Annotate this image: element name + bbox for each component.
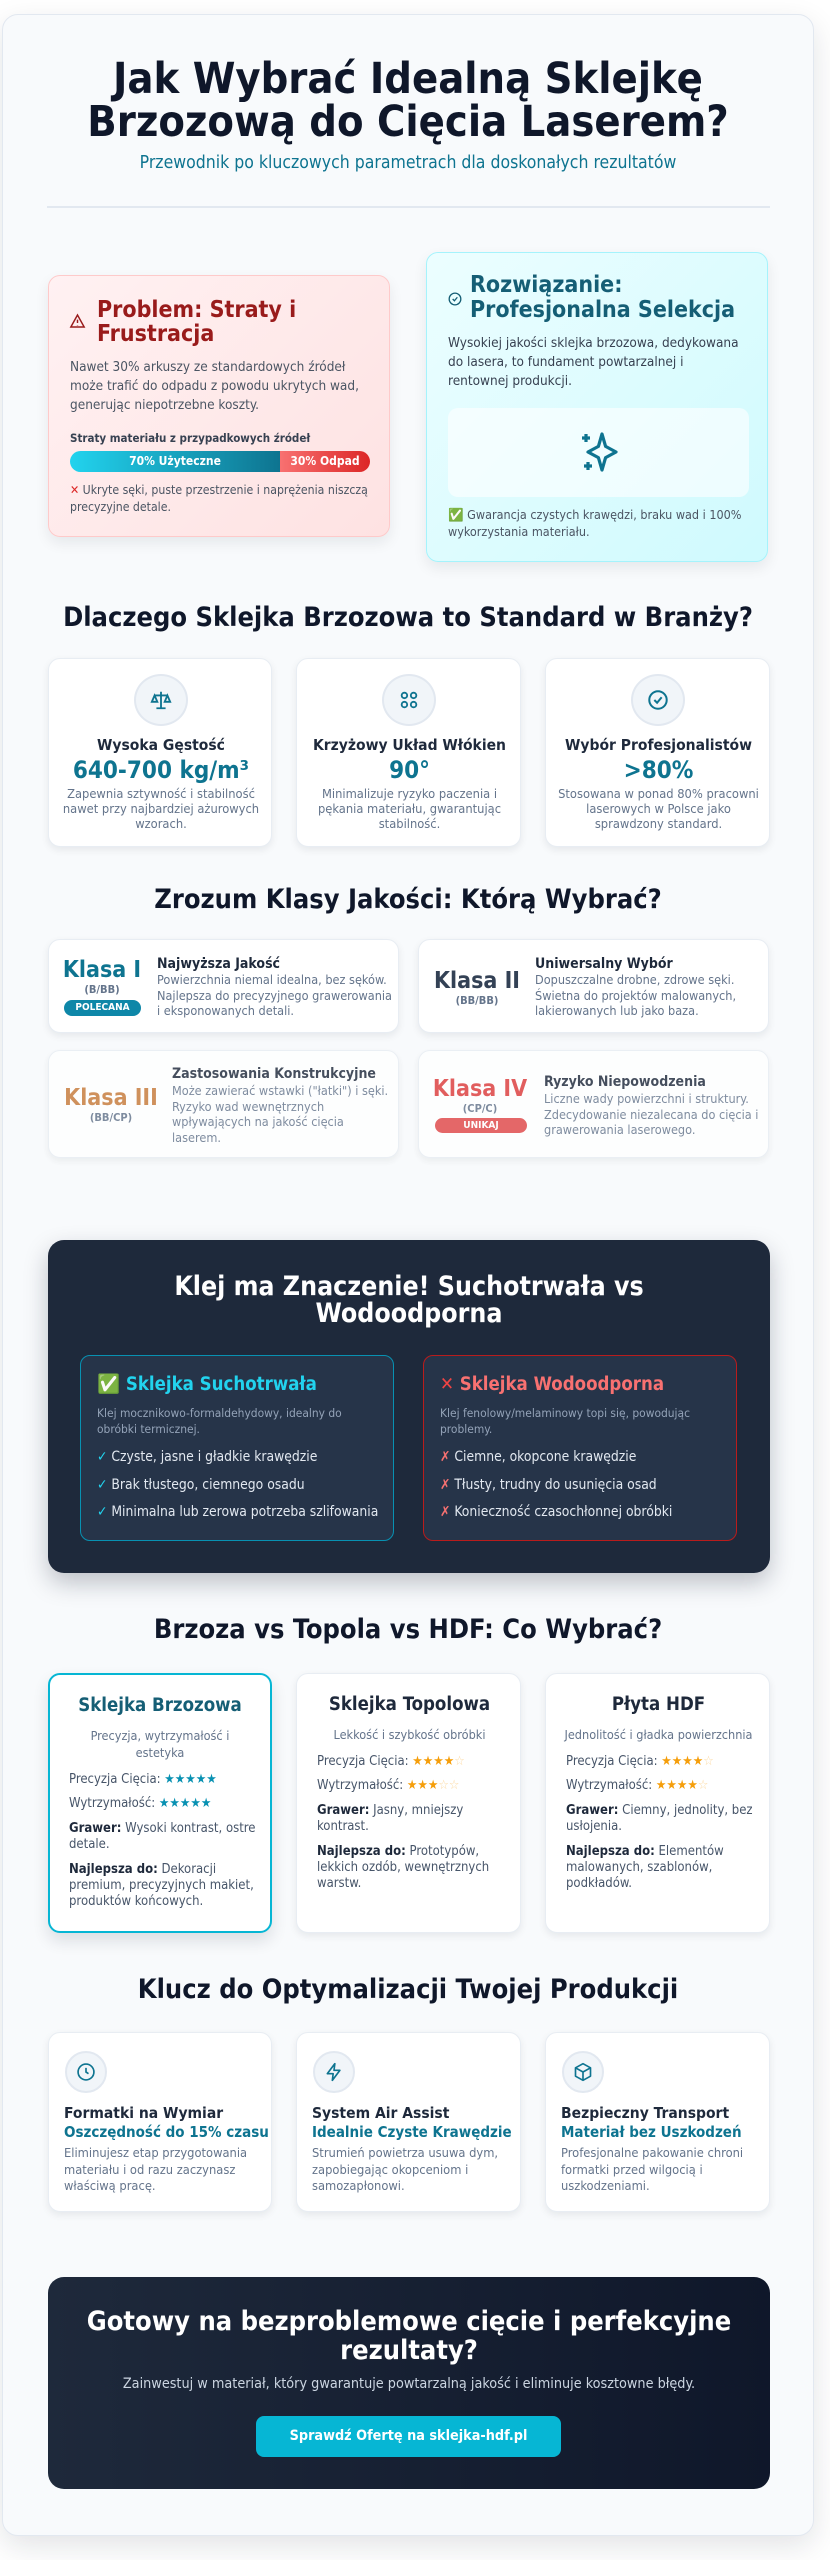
box: dry glue: ✅ Sklejka Suchotrwała: [97, 1374, 317, 1395]
solution text: Wysokiej jakości sklejka brzozowa, dedykowana do lasera, to fundament powtarzalnej i rentownej produkcji.: [448, 335, 739, 389]
heading: why birch: Dlaczego Sklejka Brzozowa to Standard w Branży?: [63, 602, 753, 633]
feature card: air assist: [296, 2032, 521, 2212]
class card: II: Uniwersalny Wybór: [535, 956, 673, 972]
bar label: Straty materiału z przypadkowych źródeł: [70, 431, 310, 445]
stat card: professionals: [545, 658, 770, 847]
feature card: transport: Bezpieczny Transport: [561, 2104, 729, 2122]
panel: glue comparison: [48, 1240, 770, 1573]
panel: problem: [48, 275, 390, 537]
class card: IV: [418, 1050, 769, 1158]
icon: warning: [70, 314, 86, 328]
CTA heading: rezultaty?: [340, 2335, 478, 2366]
icon: grid: [382, 674, 436, 726]
box: dry glue: [80, 1355, 394, 1541]
compare card: birch: Sklejka Brzozowa: [78, 1695, 242, 1716]
compare card: birch: Grawer: Wysoki kontrast, ostre detale.: [69, 1821, 256, 1852]
CTA text: Zainwestuj w materiał, który gwarantuje powtarzalną jakość i eliminuje kosztowne błędy.: [123, 2376, 695, 2392]
CTA button: Sprawdź Ofertę na sklejka-hdf.pl: [290, 2428, 527, 2444]
heading: classes: Zrozum Klasy Jakości: Którą Wybrać?: [154, 884, 662, 915]
compare card: poplar: Najlepsza do: Prototypów, lekkich ozdób, wewnętrznych warstw.: [317, 1844, 489, 1891]
stat card: density: 640-700 kg/m³: [73, 756, 249, 784]
class card: I: Najwyższa Jakość: [157, 956, 280, 972]
class card: I: [48, 939, 399, 1033]
glue heading: Wodoodporna: [316, 1298, 502, 1329]
feature card: formats: Oszczędność do 15% czasu: [64, 2123, 269, 2141]
class card: II: Dopuszczalne drobne, zdrowe sęki. Świetna do projektów malowanych, lakierowanych lub jako baza.: [535, 972, 736, 1018]
panel: solution: [426, 252, 768, 562]
compare card: HDF: Płyta HDF: [612, 1694, 705, 1715]
compare card: HDF: Precyzja Cięcia: ★★★★☆: [566, 1754, 714, 1769]
stat card: cross grain: [296, 658, 521, 847]
box: dry glue: ✓ Minimalna lub zerowa potrzeba szlifowania: [97, 1504, 378, 1520]
box: dry glue: Klej mocznikowo-formaldehydowy, idealny do obróbki termicznej.: [97, 1406, 342, 1436]
compare card: birch: Najlepsza do: Dekoracji premium, precyzyjnych makiet, produktów końcowych.: [69, 1862, 254, 1909]
class card: III: Zastosowania Konstrukcyjne: [172, 1066, 376, 1082]
box: dry glue: ✓ Brak tłustego, ciemnego osadu: [97, 1477, 305, 1493]
compare card: poplar: Lekkość i szybkość obróbki: [334, 1727, 486, 1742]
feature card: air assist: Strumień powietrza usuwa dym, zapobiegając okopceniom i samozapłonowi.: [312, 2146, 498, 2194]
class card: I: Klasa I: [63, 957, 141, 983]
solution heading: Rozwiązanie: Profesjonalna Selekcja: [470, 272, 735, 323]
title: Jak Wybrać Idealną Sklejkę: [113, 54, 703, 104]
stat card: cross grain: 90°: [389, 756, 430, 784]
feature card: air assist: Idealnie Czyste Krawędzie: [312, 2123, 512, 2141]
stat card: professionals: Stosowana w ponad 80% pracowni laserowych w Polsce jako sprawdzony standard.: [558, 787, 759, 832]
class card: IV: Liczne wady powierzchni i struktury. Zdecydowanie niezalecana do cięcia i grawerowania laserowego.: [544, 1091, 758, 1137]
compare card: HDF: Jednolitość i gładka powierzchnia: [564, 1727, 752, 1742]
CTA heading: Gotowy na bezproblemowe cięcie i perfekcyjne: [87, 2306, 731, 2337]
class card: I: (B/BB): [84, 983, 120, 996]
class card: II: [418, 939, 769, 1033]
compare card: HDF: Wytrzymałość: ★★★★☆: [566, 1778, 708, 1793]
stat card: cross grain: Minimalizuje ryzyko paczenia i pękania materiału, gwarantując stabilność.: [318, 787, 501, 832]
compare card: poplar: Wytrzymałość: ★★★☆☆: [317, 1778, 459, 1793]
compare card: poplar: [296, 1673, 521, 1933]
icon: check circle: [448, 292, 462, 306]
stat card: cross grain: Krzyżowy Układ Włókien: [313, 736, 506, 754]
stat card: professionals: >80%: [624, 756, 693, 784]
feature card: air assist: System Air Assist: [312, 2104, 449, 2122]
box: waterproof glue: ✗ Konieczność czasochłonnej obróbki: [440, 1504, 672, 1520]
title: [87, 54, 729, 147]
feature card: transport: [545, 2032, 770, 2212]
class card: II: (BB/BB): [456, 994, 498, 1007]
icon: sparkle box: [448, 408, 749, 497]
compare card: HDF: [545, 1673, 770, 1933]
badge: polecana: POLECANA: [75, 1002, 130, 1013]
feature card: transport: Materiał bez Uszkodzeń: [561, 2123, 742, 2141]
class card: III: (BB/CP): [90, 1111, 132, 1124]
compare card: poplar: Precyzja Cięcia: ★★★★☆: [317, 1754, 465, 1769]
panel: call to action: [48, 2277, 770, 2489]
compare card: HDF: Grawer: Ciemny, jednolity, bez usłojenia.: [566, 1803, 753, 1834]
icon: clock: [65, 2051, 107, 2093]
class card: IV: Klasa IV: [433, 1076, 527, 1102]
problem note: ✕ Ukryte sęki, puste przestrzenie i naprężenia niszczą precyzyjne detale.: [70, 483, 368, 514]
icon: bolt: [313, 2051, 355, 2093]
problem text: Nawet 30% arkuszy ze standardowych źródeł może trafić do odpadu z powodu ukrytych wad, generując niepotrzebne koszty.: [70, 359, 359, 413]
class card: IV: Ryzyko Niepowodzenia: [544, 1074, 706, 1090]
heading: comparison: Brzoza vs Topola vs HDF: Co Wybrać?: [154, 1614, 662, 1645]
heading: optimization: Klucz do Optymalizacji Twojej Produkcji: [138, 1974, 678, 2005]
box: waterproof glue: ✗ Tłusty, trudny do usunięcia osad: [440, 1477, 657, 1493]
compare card: HDF: Najlepsza do: Elementów malowanych, szablonów, podkładów.: [566, 1844, 724, 1891]
bar chart: waste: 70% Użyteczne: [129, 454, 221, 468]
class card: IV: (CP/C): [463, 1102, 497, 1115]
CTA heading: [87, 2306, 731, 2366]
title: Brzozową do Cięcia Laserem?: [87, 97, 729, 147]
compare card: birch: Wytrzymałość: ★★★★★: [69, 1796, 211, 1811]
compare card: birch: Precyzja Cięcia: ★★★★★: [69, 1772, 217, 1787]
stat card: density: [48, 658, 272, 847]
bar chart: waste: [70, 451, 370, 472]
badge: polecana: [64, 1000, 141, 1016]
compare card: birch: Precyzja, wytrzymałość i estetyka: [91, 1728, 229, 1760]
box: waterproof glue: [423, 1355, 737, 1541]
class card: III: [48, 1050, 399, 1158]
glue heading: Klej ma Znaczenie! Suchotrwała vs: [174, 1271, 644, 1302]
badge: unikaj: UNIKAJ: [463, 1120, 499, 1131]
glue heading: [174, 1271, 644, 1329]
box: waterproof glue: ✕ Sklejka Wodoodporna: [440, 1374, 664, 1395]
feature card: formats: Eliminujesz etap przygotowania materiału i od razu zaczynasz właściwą pracę.: [64, 2146, 247, 2194]
compare card: poplar: Grawer: Jasny, mniejszy kontrast.: [317, 1803, 463, 1834]
stat card: professionals: Wybór Profesjonalistów: [565, 736, 752, 754]
class card: II: Klasa II: [434, 968, 520, 994]
icon: box: [562, 2051, 604, 2093]
compare card: poplar: Sklejka Topolowa: [329, 1694, 490, 1715]
problem heading: Problem: Straty i Frustracja: [97, 297, 296, 347]
class card: III: Może zawierać wstawki ("łatki") i sęki. Ryzyko wad wewnętrznych wpływających na jakość cięcia laserem.: [172, 1083, 388, 1144]
bar chart: waste: 30% Odpad: [290, 454, 360, 468]
compare card: birch: [48, 1673, 272, 1933]
CTA button: [256, 2416, 561, 2457]
icon: scale: [134, 674, 188, 726]
box: dry glue: ✓ Czyste, jasne i gładkie krawędzie: [97, 1449, 317, 1465]
icon: check: [631, 674, 685, 726]
stat card: density: Wysoka Gęstość: [97, 736, 225, 754]
box: waterproof glue: Klej fenolowy/melaminowy topi się, powodując problemy.: [440, 1406, 690, 1436]
class card: I: Powierzchnia niemal idealna, bez sęków. Najlepsza do precyzyjnego grawerowania i eksponowanych detali.: [157, 972, 392, 1018]
feature card: transport: Profesjonalne pakowanie chroni formatki przed wilgocią i uszkodzeniami.: [561, 2146, 743, 2194]
stat card: density: Zapewnia sztywność i stabilność nawet przy najbardziej ażurowych wzorach.: [63, 787, 259, 832]
feature card: formats: [48, 2032, 272, 2212]
class card: III: Klasa III: [64, 1085, 158, 1111]
subtitle: Przewodnik po kluczowych parametrach dla doskonałych rezultatów: [140, 153, 676, 173]
box: waterproof glue: ✗ Ciemne, okopcone krawędzie: [440, 1449, 636, 1465]
badge: unikaj: [435, 1118, 527, 1133]
feature card: formats: Formatki na Wymiar: [64, 2104, 223, 2122]
solution note: ✅ Gwarancja czystych krawędzi, braku wad i 100% wykorzystania materiału.: [448, 507, 741, 539]
